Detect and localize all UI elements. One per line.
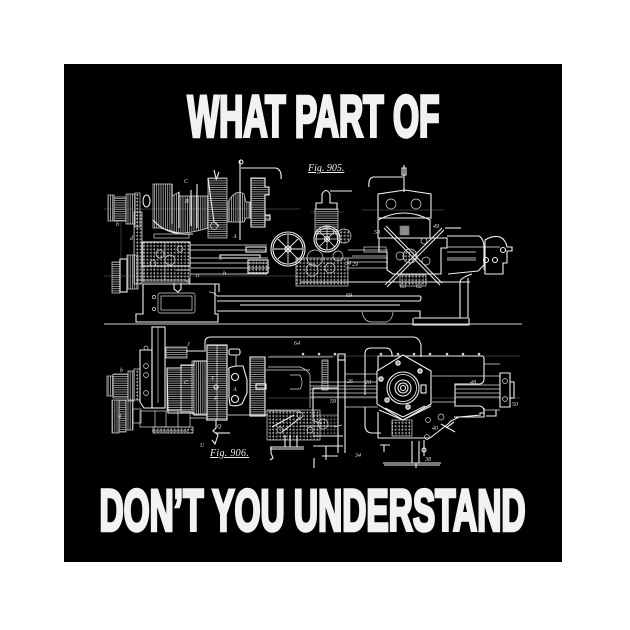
tiny part labels: P — [213, 396, 218, 402]
apron gear cluster — [267, 410, 320, 440]
main saddle — [378, 356, 484, 414]
tiny part labels: q — [118, 413, 121, 419]
figure label: Fig. 906: Fig. 906. — [209, 448, 249, 459]
tiny part labels: 63 — [400, 284, 406, 290]
right slide and end bracket — [447, 236, 512, 274]
tiny part labels: 40 — [432, 425, 438, 432]
tiny part labels: A — [232, 234, 237, 240]
tiny part labels — [116, 179, 439, 299]
tiny part labels: d — [130, 236, 134, 242]
spindle pulley — [107, 369, 140, 401]
tiny part labels: C — [184, 380, 189, 386]
tiny part labels: b — [116, 222, 119, 228]
stepped gears below pulley — [112, 400, 141, 433]
lathe bed — [209, 292, 421, 322]
chuck — [251, 178, 270, 227]
centre divider line — [104, 323, 522, 325]
tiny part labels: h — [223, 271, 226, 277]
hand crank left — [270, 435, 304, 460]
right slide and end block — [432, 364, 514, 417]
lower saddle and feed screws — [378, 406, 481, 439]
coolant pipe left — [239, 160, 281, 240]
tiny part labels: 38 — [424, 457, 431, 463]
spindle bearing — [228, 192, 250, 222]
hexagonal turret plate — [377, 355, 431, 420]
tiny part labels — [118, 340, 518, 463]
tiny part labels: A — [232, 387, 237, 393]
tiny part labels: 69 — [346, 293, 352, 299]
crossed tool slide arms — [384, 226, 444, 287]
tiny part labels: J — [187, 342, 190, 348]
patent drawing: top lathe elevation — [104, 160, 512, 325]
coolant pipe right — [369, 165, 406, 192]
spindle bed outline — [205, 337, 421, 411]
chuck — [250, 357, 266, 416]
lower left gear pulley — [104, 212, 300, 293]
tiny part labels: 29 — [352, 262, 358, 268]
tiny part labels: 62 — [416, 284, 422, 290]
tiny part labels: 34 — [344, 260, 351, 267]
tiny part labels: C — [184, 179, 189, 185]
hand wheel — [271, 232, 305, 266]
bearing yoke — [228, 349, 268, 415]
control cabinet with gauges — [362, 190, 444, 238]
tiny part labels: T — [211, 376, 215, 382]
feed rods — [190, 245, 270, 274]
tiny part labels: 64 — [294, 340, 300, 347]
headstock — [143, 184, 208, 238]
tiny part labels: Q — [217, 424, 222, 430]
apron — [136, 242, 190, 284]
tall gear column — [140, 327, 165, 408]
heading: what part of: WHAT PART OF — [188, 84, 440, 150]
headstock — [140, 347, 208, 433]
tiny part labels: 26 — [347, 379, 353, 385]
tiny part labels: b — [120, 368, 123, 374]
tailstock carriage — [300, 360, 343, 468]
figure label: Fig. 905: Fig. 905. — [307, 163, 344, 174]
tiny part labels: 34 — [354, 452, 361, 459]
guide rods — [268, 356, 520, 407]
clutch column — [206, 345, 230, 444]
tiny part labels: S — [219, 256, 222, 262]
lever column — [208, 170, 227, 238]
patent drawing: bottom lathe plan view — [107, 327, 520, 468]
pedestal right — [413, 274, 472, 325]
tiny part labels: 59 — [330, 399, 336, 405]
rounded guard behind saddle — [365, 348, 392, 433]
second hand wheel — [314, 226, 340, 252]
bolt row on saddle — [302, 353, 480, 355]
gear train — [296, 229, 351, 286]
tailstock post — [311, 190, 352, 234]
tiny part labels: 58 — [374, 230, 380, 236]
tiny part labels: n — [196, 273, 199, 279]
pedestal left — [136, 283, 219, 322]
tiny part labels: 50 — [512, 402, 518, 408]
tiny part labels: 49 — [433, 223, 439, 230]
black poster panel — [64, 64, 562, 562]
tiny part labels: B — [185, 199, 189, 205]
tiny part labels: 48 — [470, 379, 476, 386]
left spindle pulley — [104, 193, 300, 227]
tiny part labels: U — [200, 443, 205, 449]
hand wheel crank — [380, 440, 441, 468]
tall guide column — [338, 354, 345, 453]
carriage — [379, 228, 461, 286]
cross slide rails — [300, 247, 470, 282]
tiny part labels: 20 — [365, 380, 371, 386]
